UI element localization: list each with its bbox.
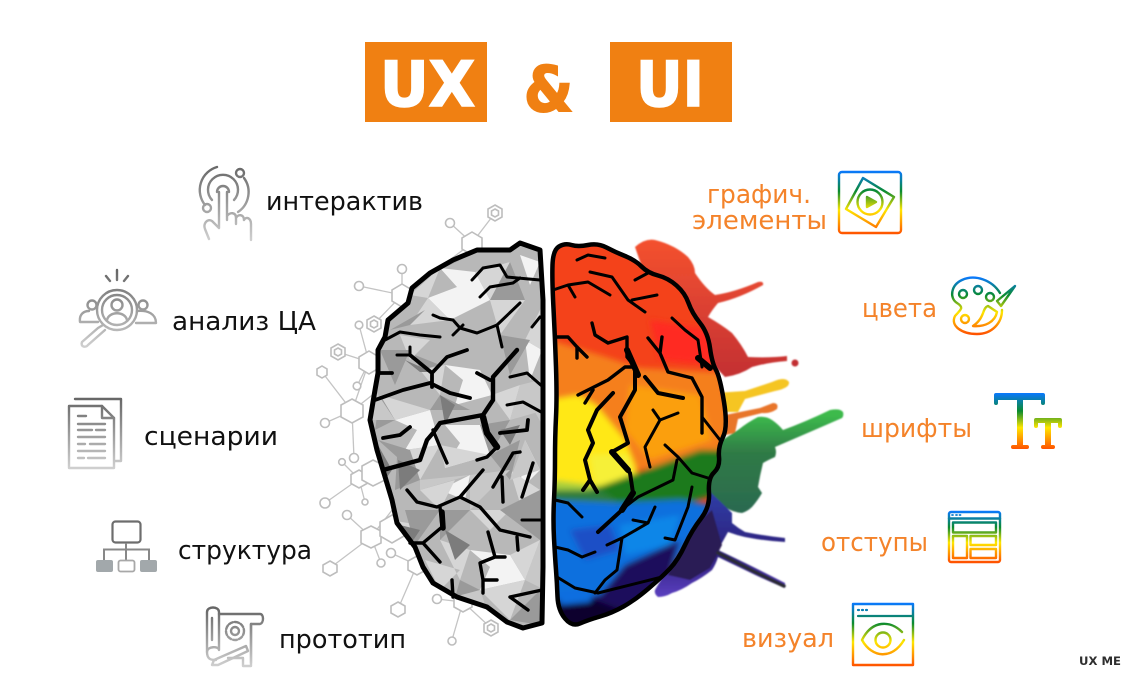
icon: documents	[69, 399, 121, 468]
right brain folds and outline	[552, 244, 726, 625]
label: анализ ЦА	[172, 307, 316, 337]
title badge: UI: UI	[636, 48, 704, 121]
icon: hierarchy	[96, 522, 157, 572]
label	[692, 180, 827, 236]
label: цвета	[862, 294, 937, 324]
item: структура	[96, 522, 312, 572]
icon: audience magnifier	[80, 270, 156, 347]
label: визуал	[742, 624, 834, 654]
item: графич. элементы	[692, 172, 901, 236]
yellow drip	[715, 379, 789, 412]
label: прототип	[279, 625, 406, 655]
left brain folds and outline	[370, 243, 543, 628]
title badge: UX: UX	[380, 48, 475, 121]
icon: play in frame	[839, 172, 901, 233]
label: элементы	[692, 206, 827, 236]
item: интерактив	[200, 167, 423, 240]
item: прототип	[207, 608, 406, 666]
label: сценарии	[144, 422, 278, 452]
item: анализ ЦА	[80, 270, 316, 347]
icon: touch target	[200, 167, 251, 240]
title ampersand: &	[524, 53, 573, 126]
icon: palette	[952, 278, 1015, 334]
title badge: UI	[610, 42, 732, 122]
dark purple stain	[668, 510, 722, 580]
red splash	[635, 240, 787, 377]
green splash	[705, 409, 843, 513]
dark drip	[718, 553, 784, 586]
label: интерактив	[266, 187, 423, 217]
label: отступы	[821, 528, 928, 558]
icon: page layout	[949, 512, 1000, 562]
orange drip	[725, 403, 778, 435]
icon: blueprint	[207, 608, 263, 666]
item: сценарии	[69, 399, 278, 468]
purple splash	[655, 490, 785, 597]
left brain: low-poly grey hemisphere	[365, 238, 550, 633]
label: графич.	[707, 180, 811, 210]
brand mark: UX ME	[1079, 654, 1121, 668]
red droplet	[792, 360, 798, 366]
item: шрифты	[861, 393, 1062, 449]
label: структура	[178, 536, 312, 566]
label: шрифты	[861, 414, 972, 444]
icon: eye in browser	[853, 604, 913, 665]
molecule network behind left brain	[317, 205, 502, 645]
right brain: rainbow hemisphere	[545, 235, 735, 635]
watercolor splashes behind right brain	[635, 240, 843, 597]
item: цвета	[862, 278, 1015, 334]
icon: Tt	[994, 393, 1062, 449]
item: визуал	[742, 604, 913, 665]
item: отступы	[821, 512, 1000, 562]
title	[365, 42, 732, 126]
